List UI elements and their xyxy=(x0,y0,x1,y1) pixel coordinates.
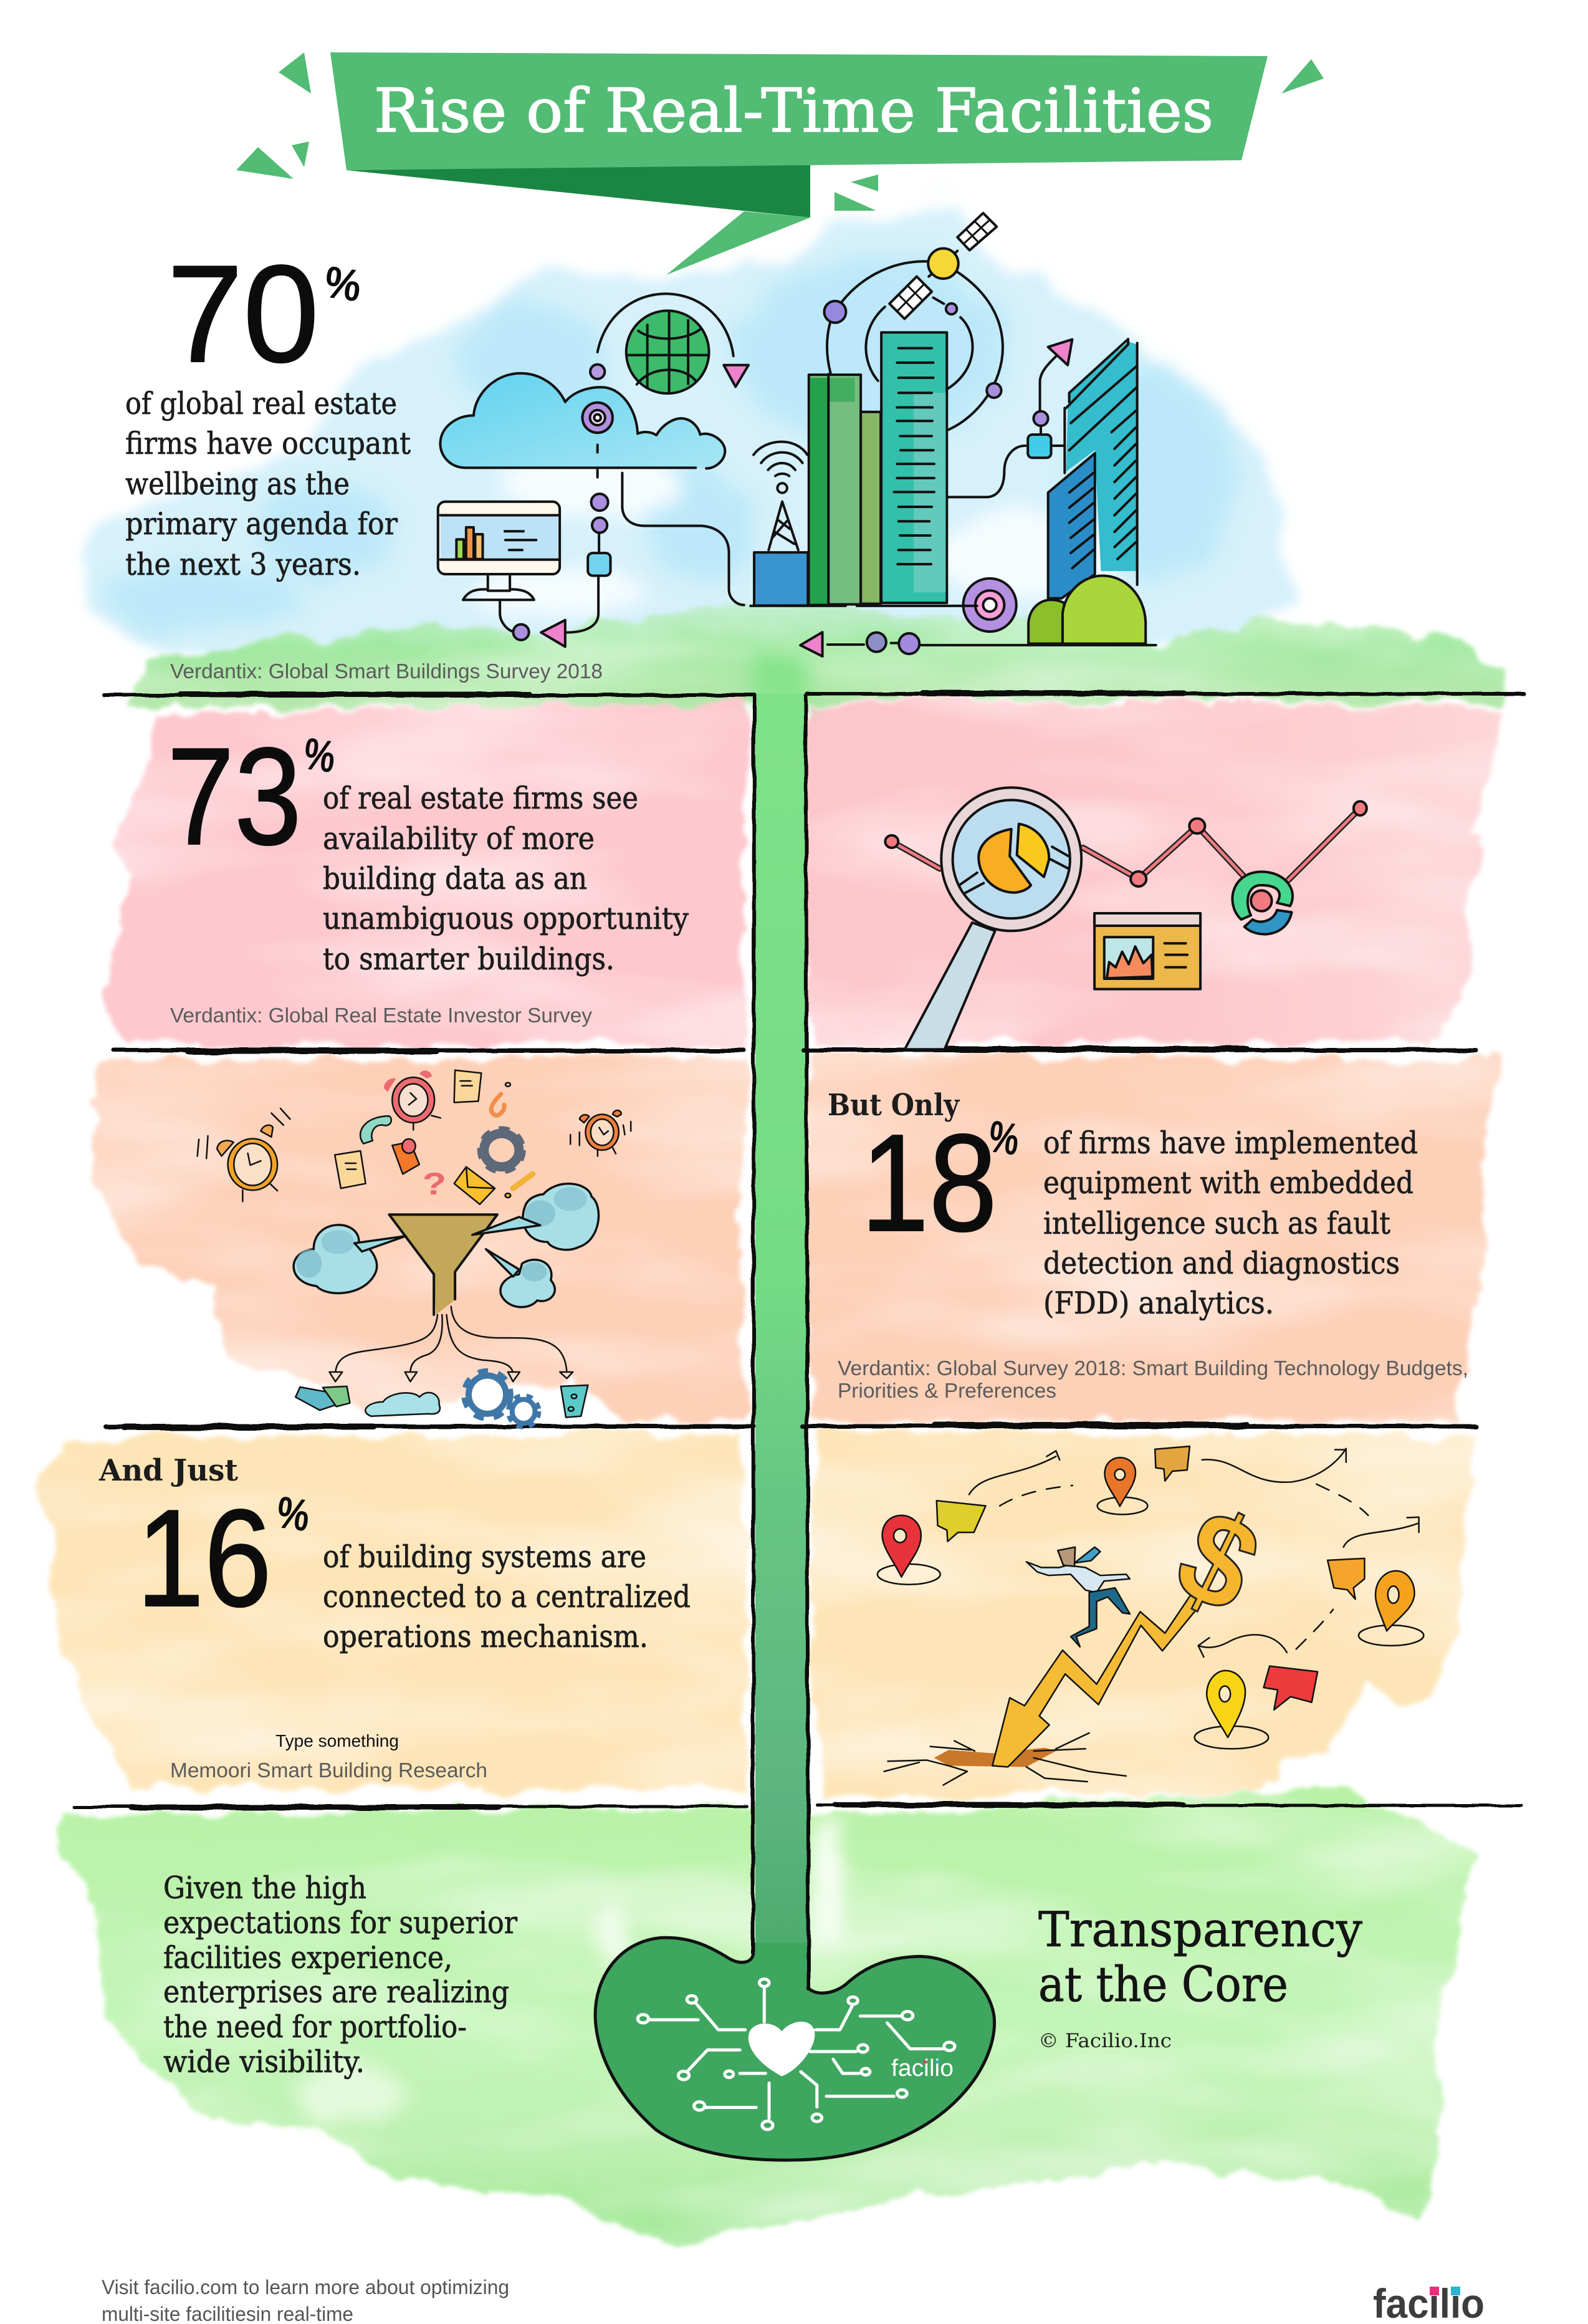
closing text block: enterprises are realizing xyxy=(163,1974,509,2010)
connector to monitor xyxy=(541,494,611,646)
teal tower xyxy=(881,332,947,603)
copyright: © Facilio.Inc xyxy=(1038,2030,1172,2052)
icon: cloud xyxy=(440,373,725,468)
pale patches beside stem xyxy=(293,1817,841,2126)
panel wash: pink right xyxy=(800,702,1499,1045)
row 1 left rule xyxy=(104,693,754,697)
stat block: 16 percent xyxy=(98,1453,691,1782)
inked divider lines xyxy=(74,693,1524,1989)
closing text block: expectations for superior xyxy=(163,1905,518,1941)
heading: transparency at the core xyxy=(1038,1902,1362,2013)
body text: building data as an xyxy=(323,861,587,896)
body text: to smarter buildings. xyxy=(323,941,615,977)
body text: of real estate firms see xyxy=(323,780,638,816)
handshake icon xyxy=(295,1386,350,1410)
pot logo: facilio xyxy=(891,2055,954,2082)
stat block: 18 percent xyxy=(828,1088,1468,1402)
label: and just: And Just xyxy=(98,1453,238,1488)
closing text block: the need for portfolio- xyxy=(163,2009,467,2045)
pie chart xyxy=(978,824,1049,893)
pin: orange xyxy=(1098,1457,1147,1514)
output arrows xyxy=(329,1307,573,1381)
body text: equipment with embedded xyxy=(1043,1165,1413,1201)
dollar sign: $ xyxy=(1156,1480,1281,1641)
question mark: ? xyxy=(423,1167,446,1201)
body text: (FDD) analytics. xyxy=(1043,1285,1274,1321)
panel wash: peach left xyxy=(91,1057,744,1421)
speech bubbles xyxy=(937,1446,1364,1710)
line chart xyxy=(885,801,1367,886)
illustration: funnel xyxy=(198,1070,631,1427)
icon: circuit heart xyxy=(638,1979,955,2130)
body text: detection and diagnostics xyxy=(1043,1246,1400,1281)
body text: availability of more xyxy=(323,821,595,857)
body text: of firms have implemented xyxy=(1043,1125,1418,1161)
source: Priorities & Preferences xyxy=(838,1379,1056,1402)
panel wash: green bottom xyxy=(58,1787,1473,2247)
panel wash: blue sky xyxy=(76,181,1296,655)
icon: monitor xyxy=(438,502,560,640)
cup icon xyxy=(561,1385,588,1418)
pot with circuit heart xyxy=(595,1937,995,2160)
illustration: rising arrow and pins xyxy=(878,1446,1423,1785)
gear xyxy=(481,1130,522,1171)
label: but only: But Only xyxy=(828,1088,960,1123)
route arrows xyxy=(969,1449,1419,1657)
body text: unambiguous opportunity xyxy=(323,901,689,936)
closing text block: wide visibility. xyxy=(163,2044,365,2080)
magnifier lens xyxy=(941,787,1081,931)
dashboard window xyxy=(1094,913,1200,989)
stray caption: Type something xyxy=(275,1731,399,1750)
panel wash: yellow right xyxy=(810,1432,1473,1795)
body text: operations mechanism. xyxy=(323,1619,648,1654)
panel wash: peach right xyxy=(800,1054,1499,1421)
title: Rise of Real-Time Facilities xyxy=(374,76,1213,146)
source: Verdantix: Global Smart Buildings Survey 2018 xyxy=(170,660,603,683)
icon: globe xyxy=(626,310,709,393)
gears icon xyxy=(464,1371,538,1427)
pin: red xyxy=(878,1515,940,1585)
connector cable xyxy=(622,473,744,605)
connector and arrow xyxy=(949,339,1072,497)
documents xyxy=(335,1070,481,1188)
footer note: Visit facilio.com to learn more about optimizing xyxy=(102,2276,509,2298)
body text: of global real estate xyxy=(125,386,397,421)
funnel body xyxy=(389,1214,497,1315)
heading line two: at the Core xyxy=(1038,1957,1288,2013)
source: Verdantix: Global Real Estate Investor Survey xyxy=(170,1004,592,1027)
wifi tower xyxy=(753,442,808,605)
body text: the next 3 years. xyxy=(125,547,361,582)
illustration: magnifier and line chart xyxy=(885,787,1367,1049)
body text: intelligence such as fault xyxy=(1043,1206,1390,1241)
big number 70: 70 xyxy=(167,237,319,391)
percent sign: % xyxy=(300,729,338,782)
banner fold xyxy=(347,163,810,218)
panel wash: pink left xyxy=(101,702,744,1045)
heading line one: Transparency xyxy=(1038,1902,1362,1958)
phone and bell xyxy=(360,1116,419,1174)
pin: yellow xyxy=(1195,1671,1268,1749)
panel wash: yellow left xyxy=(41,1432,744,1789)
banner tail xyxy=(666,211,810,275)
body text: of building systems are xyxy=(323,1539,646,1575)
envelope and marks xyxy=(454,1083,533,1204)
source: Verdantix: Global Survey 2018: Smart Building Technology Budgets, xyxy=(838,1356,1468,1380)
body text: firms have occupant xyxy=(125,426,411,461)
donut gauge xyxy=(1232,872,1293,934)
stem fill xyxy=(751,651,810,1977)
arc and marker xyxy=(590,294,749,387)
cloud node xyxy=(582,403,613,489)
big number 18: 18 xyxy=(861,1106,997,1260)
alarm clock left xyxy=(198,1108,290,1201)
stat block: 73 percent xyxy=(167,719,689,1027)
closing text block: facilities experience, xyxy=(163,1940,452,1976)
cloud icon xyxy=(365,1393,440,1416)
stat block: 70 percent xyxy=(125,237,603,683)
ground crack xyxy=(884,1733,1126,1785)
percent sign: % xyxy=(274,1487,313,1541)
closing text block: Given the high xyxy=(163,1870,366,1906)
alarm clock top xyxy=(384,1070,441,1130)
percent sign: % xyxy=(322,257,364,312)
title banner xyxy=(236,52,1324,275)
pin: gold xyxy=(1359,1571,1423,1646)
big number 16: 16 xyxy=(136,1481,272,1636)
orbit and satellite xyxy=(825,213,1003,430)
zigzag arrow xyxy=(992,1595,1202,1767)
glass towers xyxy=(1048,339,1137,598)
panel wash: green strip xyxy=(132,605,1499,708)
climbing man xyxy=(1026,1547,1130,1647)
illustration: city skyline xyxy=(750,213,1156,656)
confetti triangles xyxy=(236,52,1324,211)
bushes xyxy=(1028,575,1146,644)
pot xyxy=(595,1937,995,2160)
source: Memoori Smart Building Research xyxy=(170,1759,487,1782)
bottom connector xyxy=(800,632,1156,656)
body text: primary agenda for xyxy=(125,506,398,542)
magnifier handle xyxy=(905,923,995,1049)
banner ribbon xyxy=(330,52,1268,170)
body text: connected to a centralized xyxy=(323,1579,691,1615)
green tower xyxy=(809,374,881,604)
big number 73: 73 xyxy=(167,719,302,874)
illustration: cloud, globe and monitor xyxy=(438,294,749,646)
speech clouds xyxy=(294,1184,599,1307)
body text: wellbeing as the xyxy=(125,466,350,502)
alarm clock right xyxy=(570,1110,631,1156)
percent sign: % xyxy=(986,1112,1022,1165)
ground line and target xyxy=(750,579,1016,645)
